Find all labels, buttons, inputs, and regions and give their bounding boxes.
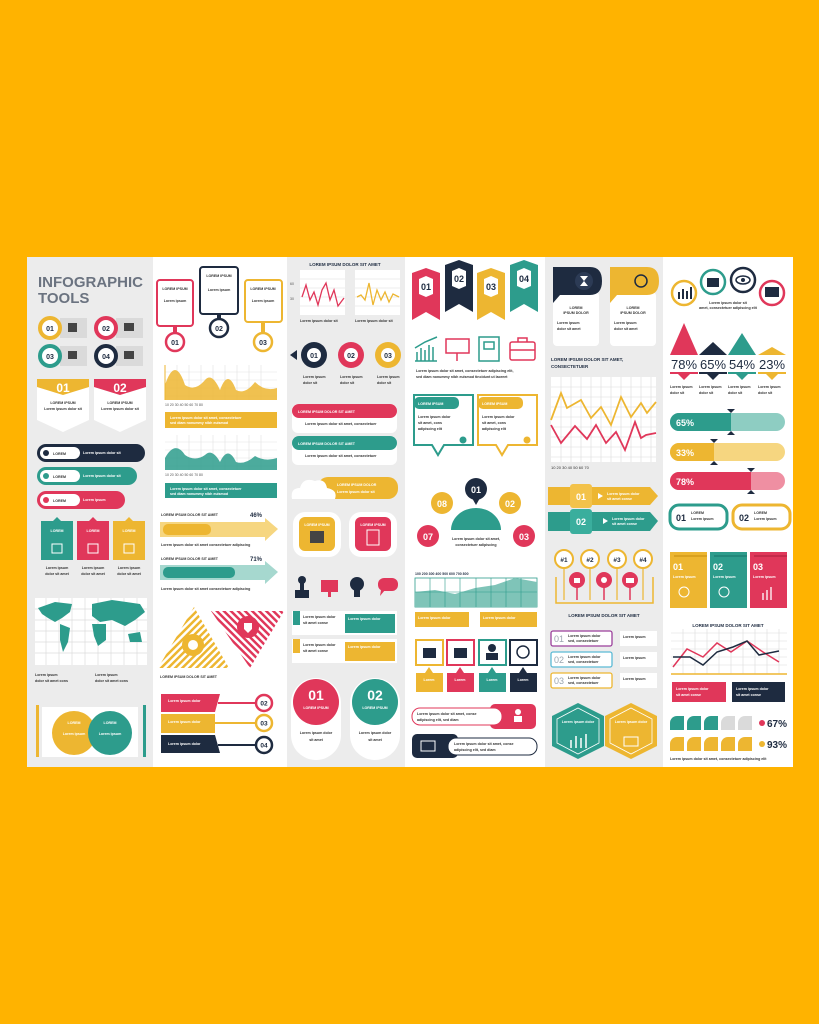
globe with numbered pins: 02 [505, 499, 515, 509]
three icon cards: dolor sit amet [117, 572, 142, 576]
percentage triangles: Lorem ipsum [728, 385, 751, 389]
ribbons 01-04 [412, 260, 538, 320]
world map [35, 598, 147, 665]
ribbon cards 01 02: 02 [113, 381, 127, 395]
folded boxes 01 02 03: 02 [713, 562, 723, 572]
three icon cards: Lorem ipsum [82, 566, 104, 570]
percentage triangles: 78% [671, 357, 697, 372]
banner red [292, 404, 397, 433]
progress bars: 33% [676, 448, 694, 458]
hanging tags: 01 [171, 340, 179, 347]
folded boxes 01 02 03: 01 [673, 562, 683, 572]
panel: infographic sheet [27, 257, 793, 767]
title: LOREM IPSUM DOLOR SIT AMET [568, 613, 640, 618]
banner red: LOREM IPSUM DOLOR SIT AMET [298, 410, 356, 414]
tab cards: IPSUM DOLOR [620, 311, 646, 315]
two line charts: 60 [290, 282, 294, 286]
hanging tags: Lorem ipsum [208, 288, 230, 292]
percentage triangles: dolor sit [699, 391, 714, 395]
folded boxes 01 02 03: Lorem ipsum [753, 575, 776, 579]
big numbered circles: Lorem ipsum dolor [359, 731, 392, 735]
bookmark rows: Lorem ipsum dolor [348, 645, 381, 649]
pill navy [412, 734, 537, 758]
title: TOOLS [38, 290, 89, 307]
speech box yellow: Lorem ipsum dolor [482, 415, 515, 419]
progress bars: 78% [676, 477, 694, 487]
hanging tags: Lorem ipsum [252, 299, 274, 303]
pill list: LOREM [53, 475, 66, 479]
caption boxes: sit amet conse [676, 693, 701, 697]
numbered list: Lorem ipsum dolor [568, 676, 601, 680]
ribbons 01-04: 04 [519, 274, 529, 284]
ribbon cards 01 02: Lorem ipsum dolor sit [44, 407, 83, 411]
ribbon cards 01 02: 01 [56, 381, 70, 395]
dot rating 67% 93%: 67% [767, 719, 787, 730]
line chart [551, 377, 656, 470]
tab cards: dolor sit amet [557, 327, 581, 331]
hexagons: Lorem ipsum dolor [562, 720, 595, 724]
numbered circles row: Lorem ipsum [340, 375, 363, 379]
ribbons 01-04: 02 [454, 274, 464, 284]
arrow banner 02: sit amet conse [612, 522, 637, 526]
column 2 [157, 267, 284, 753]
pill list: Lorem ipsum dolor sit [83, 451, 122, 455]
icon boxes: Lorem [455, 678, 465, 682]
percentage triangles: Lorem ipsum [670, 385, 693, 389]
numbered list: Lorem ipsum dolor [568, 655, 601, 659]
pill list: Lorem ipsum dolor sit [83, 474, 122, 478]
progress bars [670, 409, 785, 494]
hash pins: #4 [639, 557, 647, 564]
numbered list: Lorem ipsum dolor [568, 634, 601, 638]
arrow banner 01 [548, 484, 658, 508]
ribbon cards 01 02: Lorem ipsum dolor sit [101, 407, 140, 411]
three icon cards: Lorem ipsum [46, 566, 68, 570]
area chart: 100 200 300 400 500 600 700 800 [415, 572, 469, 576]
title [38, 274, 143, 307]
pill red: Lorem ipsum dolor sit amet, conse [417, 712, 477, 716]
chart title: LOREM IPSUM DOLOR SIT AMET, [551, 357, 623, 362]
progress arrows: LOREM IPSUM DOLOR SIT AMET [161, 513, 219, 517]
hanging tags: LOREM IPSUM [206, 274, 232, 278]
numbered circles with icons: 01 [46, 326, 54, 333]
percentage triangles: 54% [729, 357, 755, 372]
paragraph: sed diam nonummy nibh euismod tincidunt ut laoreet [416, 375, 508, 379]
ribbon cards 01 02 [37, 379, 146, 432]
step bars 02 03 04: 03 [260, 720, 268, 728]
yellow captions [415, 612, 537, 627]
pill navy: Lorem ipsum dolor sit amet, conse [454, 742, 514, 746]
hash pins: #3 [613, 557, 621, 564]
bookmark rows: sit amet conse [303, 621, 328, 625]
banner red: Lorem ipsum dolor sit amet, consectetuer [305, 422, 377, 426]
hanging tags: LOREM IPSUM [250, 287, 276, 291]
bookmark rows: sit amet conse [303, 649, 328, 653]
bookmark rows: Lorem ipsum dolor [303, 615, 336, 619]
bookmark rows: Lorem ipsum dolor [303, 643, 336, 647]
numbered circles row [290, 342, 401, 385]
caption boxes: Lorem ipsum dolor [676, 687, 709, 691]
column 6 [670, 268, 790, 761]
big numbered circles: sit amet [309, 738, 324, 742]
hash pins: #2 [586, 557, 594, 564]
step bars 02 03 04: Lorem ipsum dolor [168, 699, 201, 703]
speech box teal: adipiscing elit [418, 427, 443, 431]
hexagons: Lorem ipsum dolor [615, 720, 648, 724]
numbered circles row: dolor sit [377, 381, 392, 385]
numbered circles row: 03 [384, 353, 392, 360]
circle pair [36, 705, 146, 757]
map captions [35, 673, 128, 683]
three icon cards: dolor sit amet [81, 572, 106, 576]
globe with numbered pins: 01 [471, 485, 481, 495]
pill list [37, 444, 145, 509]
numbered circles row: dolor sit [303, 381, 318, 385]
pill red [412, 704, 536, 729]
globe with numbered pins: 07 [423, 532, 433, 542]
tab cards: Lorem ipsum [614, 321, 637, 325]
two line charts: Lorem ipsum dolor sit [355, 319, 394, 323]
numbered list: Lorem ipsum [623, 656, 646, 660]
hanging tags: 02 [215, 326, 223, 333]
percentage triangles: Lorem ipsum [699, 385, 722, 389]
circle pair: Lorem ipsum [99, 732, 121, 736]
numbered list: 03 [554, 676, 564, 686]
step bars 02 03 04 [161, 694, 272, 753]
line icons row [415, 337, 535, 361]
striped triangles [158, 607, 284, 668]
three icon cards: LOREM [123, 529, 135, 533]
pills 01 02: 02 [739, 513, 749, 523]
rounded icon squares [293, 512, 397, 557]
percentage triangles: 65% [700, 357, 726, 372]
rounded icon squares: LOREM IPSUM [304, 523, 330, 527]
speech box teal: LOREM IPSUM [418, 402, 443, 406]
numbered list: Lorem ipsum [623, 677, 646, 681]
title: LOREM IPSUM DOLOR SIT AMET [692, 623, 764, 628]
title: LOREM IPSUM DOLOR SIT AMET [160, 675, 218, 679]
pill list: LOREM [53, 452, 66, 456]
column 1 [35, 274, 147, 757]
globe with numbered pins: 08 [437, 499, 447, 509]
globe with numbered pins [417, 478, 535, 547]
numbered list: Lorem ipsum [623, 635, 646, 639]
ribbons 01-04: 03 [486, 282, 496, 292]
tab cards: Lorem ipsum [557, 321, 580, 325]
banner teal [292, 436, 397, 465]
cloud banner: LOREM IPSUM DOLOR [337, 483, 377, 487]
hanging tags: Lorem ipsum [164, 299, 186, 303]
icon boxes: Lorem [424, 678, 434, 682]
ribbon cards 01 02: LOREM IPSUM [50, 401, 76, 405]
numbered circles with icons [40, 318, 143, 366]
caption boxes: sit amet conse [736, 693, 761, 697]
yellow area chart: sed diam nonummy nibh euismod [170, 421, 228, 425]
pills 01 02: Lorem ipsum [754, 517, 777, 521]
hanging tags: 03 [259, 340, 267, 347]
column 5 [548, 267, 659, 759]
three icon cards: Lorem ipsum [118, 566, 140, 570]
numbered circles row: dolor sit [340, 381, 355, 385]
yellow area chart: Lorem ipsum dolor sit amet, consectetuer [170, 416, 242, 420]
progress arrows: Lorem ipsum dolor sit amet consectetuer adipiscing [161, 543, 250, 547]
yellow captions: Lorem ipsum dolor [483, 616, 516, 620]
bookmark rows: Lorem ipsum dolor [348, 617, 381, 621]
numbered circles row: 01 [310, 353, 318, 360]
three icon cards [41, 517, 145, 576]
big numbered circles: Lorem ipsum dolor [300, 731, 333, 735]
progress arrows [160, 513, 278, 591]
arrow banner 02 [548, 509, 658, 534]
title: INFOGRAPHIC [38, 274, 143, 291]
dot rating 67% 93%: 93% [767, 740, 787, 751]
teal area chart: 10 20 30 40 50 60 70 80 [165, 473, 203, 477]
big numbered circles: LOREM IPSUM [303, 706, 329, 710]
progress arrows: 46% [250, 513, 263, 519]
icon boxes: Lorem [487, 678, 497, 682]
pill list: LOREM [53, 499, 66, 503]
yellow captions: Lorem ipsum dolor [418, 616, 451, 620]
numbered list: sed, consectetuer [568, 660, 599, 664]
globe with numbered pins: Lorem ipsum dolor sit amet, [452, 537, 500, 541]
numbered circles with icons: 04 [102, 354, 110, 361]
chart title: CONSECTETUER [551, 364, 589, 369]
dual line chart [671, 629, 787, 674]
yellow area chart [165, 365, 277, 428]
numbered circles row: 02 [347, 353, 355, 360]
percentage triangles: Lorem ipsum [758, 385, 781, 389]
icon circles: Lorem ipsum dolor sit [709, 301, 748, 305]
icon circles: amet, consectetuer adipiscing elit [699, 306, 758, 310]
big numbered circles: LOREM IPSUM [362, 706, 388, 710]
circle pair: LOREM [68, 721, 80, 725]
paragraph [416, 369, 513, 379]
numbered circles with icons: 02 [102, 326, 110, 333]
ribbons 01-04: 01 [421, 282, 431, 292]
map captions: Lorem ipsum [35, 673, 58, 677]
ribbon cards 01 02: LOREM IPSUM [107, 401, 133, 405]
banner teal: Lorem ipsum dolor sit amet, consectetuer [305, 454, 377, 458]
step bars 02 03 04: Lorem ipsum dolor [168, 742, 201, 746]
folded boxes 01 02 03 [670, 552, 787, 608]
percentage triangles: 23% [759, 357, 785, 372]
big numbered circles: sit amet [368, 738, 383, 742]
circle pair: Lorem ipsum [63, 732, 85, 736]
icon row [295, 576, 398, 598]
caption boxes: Lorem ipsum dolor [736, 687, 769, 691]
arrow banner 02: Lorem ipsum dolor [612, 517, 645, 521]
pill list: Lorem ipsum [83, 498, 106, 502]
circle pair: LOREM [104, 721, 116, 725]
teal area chart [165, 435, 277, 498]
speech box yellow: LOREM IPSUM [482, 402, 507, 406]
arrow banner 02: 02 [576, 517, 586, 527]
folded boxes 01 02 03: Lorem ipsum [713, 575, 736, 579]
column 4 [412, 260, 538, 758]
map captions: Lorem ipsum [95, 673, 118, 677]
dot rating 67% 93% [670, 716, 787, 761]
progress arrows: Lorem ipsum dolor sit amet consectetuer adipiscing [161, 587, 250, 591]
caption boxes [672, 682, 785, 702]
map captions: dolor sit amet cons [95, 679, 128, 683]
yellow area chart: 10 20 30 40 50 60 70 80 [165, 403, 203, 407]
progress arrows: 71% [250, 557, 263, 563]
tab cards [553, 267, 659, 346]
icon boxes [416, 640, 537, 692]
two line charts: 30 [290, 297, 294, 301]
three icon cards: LOREM [51, 529, 63, 533]
cloud banner: Lorem ipsum dolor sit [337, 490, 376, 494]
dot rating 67% 93%: Lorem ipsum dolor sit amet, consectetuer adipiscing elit [670, 757, 767, 761]
tab cards: LOREM [570, 306, 582, 310]
three icon cards: LOREM [87, 529, 99, 533]
numbered list: sed, consectetuer [568, 639, 599, 643]
tab cards: LOREM [627, 306, 639, 310]
hanging tags [157, 267, 282, 351]
tab cards: dolor sit amet [614, 327, 638, 331]
globe with numbered pins: consectetuer adipiscing [455, 543, 497, 547]
rounded icon squares: LOREM IPSUM [360, 523, 386, 527]
map captions: dolor sit amet cons [35, 679, 68, 683]
pills 01 02: 01 [676, 513, 686, 523]
numbered circles with icons: 03 [46, 354, 54, 361]
bookmark rows [292, 611, 397, 663]
icon boxes: Lorem [518, 678, 528, 682]
step bars 02 03 04: Lorem ipsum dolor [168, 720, 201, 724]
speech box teal: sit amet, cons [418, 421, 442, 425]
numbered list: 02 [554, 655, 564, 665]
globe with numbered pins: 03 [519, 532, 529, 542]
numbered list: sed, consectetuer [568, 681, 599, 685]
pills 01 02 [670, 505, 790, 529]
progress bars: 65% [676, 418, 694, 428]
paragraph: Lorem ipsum dolor sit amet, consectetuer adipiscing elit, [416, 369, 513, 373]
three icon cards: dolor sit amet [45, 572, 70, 576]
banner teal: LOREM IPSUM DOLOR SIT AMET [298, 442, 356, 446]
two line charts: Lorem ipsum dolor sit [300, 319, 339, 323]
speech box yellow: adipiscing elit [482, 427, 507, 431]
arrow banner 01: 01 [576, 492, 586, 502]
big numbered circles: 02 [367, 687, 383, 703]
teal area chart: Lorem ipsum dolor sit amet, consectetuer [170, 487, 242, 491]
two line charts [290, 270, 400, 323]
arrow banner 01: Lorem ipsum dolor [607, 492, 640, 496]
numbered circles row: Lorem ipsum [303, 375, 326, 379]
progress arrows: LOREM IPSUM DOLOR SIT AMET [161, 557, 219, 561]
hanging tags: LOREM IPSUM [162, 287, 188, 291]
title: LOREM IPSUM DOLOR SIT AMET [309, 262, 381, 267]
hash pins [555, 550, 653, 603]
big numbered circles [291, 678, 400, 760]
column 3 [290, 262, 401, 760]
step bars 02 03 04: 04 [260, 742, 268, 750]
tab cards: IPSUM DOLOR [563, 311, 589, 315]
percentage triangles: dolor sit [670, 391, 685, 395]
folded boxes 01 02 03: 03 [753, 562, 763, 572]
area chart [415, 572, 537, 607]
cloud banner [292, 477, 398, 499]
speech box yellow: sit amet, cons [482, 421, 506, 425]
speech box yellow [478, 395, 537, 455]
chart title [551, 357, 623, 369]
speech box teal: Lorem ipsum dolor [418, 415, 451, 419]
line chart: 10 20 30 40 50 60 70 [551, 465, 590, 470]
percentage triangles: dolor sit [758, 391, 773, 395]
hash pins: #1 [560, 557, 568, 564]
pills 01 02: LOREM [754, 511, 767, 515]
percentage triangles [670, 323, 786, 395]
big numbered circles: 01 [308, 687, 324, 703]
hexagons [552, 703, 657, 759]
step bars 02 03 04: 02 [260, 700, 268, 708]
pill red: adipiscing elit, sed diam [417, 718, 459, 722]
numbered list [551, 631, 657, 688]
numbered list: 01 [554, 634, 564, 644]
icon circles [672, 268, 784, 310]
numbered circles row: Lorem ipsum [377, 375, 400, 379]
folded boxes 01 02 03: Lorem ipsum [673, 575, 696, 579]
pill navy: adipiscing elit, sed diam [454, 748, 496, 752]
speech box teal [414, 395, 473, 455]
percentage triangles: dolor sit [728, 391, 743, 395]
pills 01 02: LOREM [691, 511, 704, 515]
pills 01 02: Lorem ipsum [691, 517, 714, 521]
arrow banner 01: sit amet conse [607, 497, 632, 501]
teal area chart: sed diam nonummy nibh euismod [170, 492, 228, 496]
